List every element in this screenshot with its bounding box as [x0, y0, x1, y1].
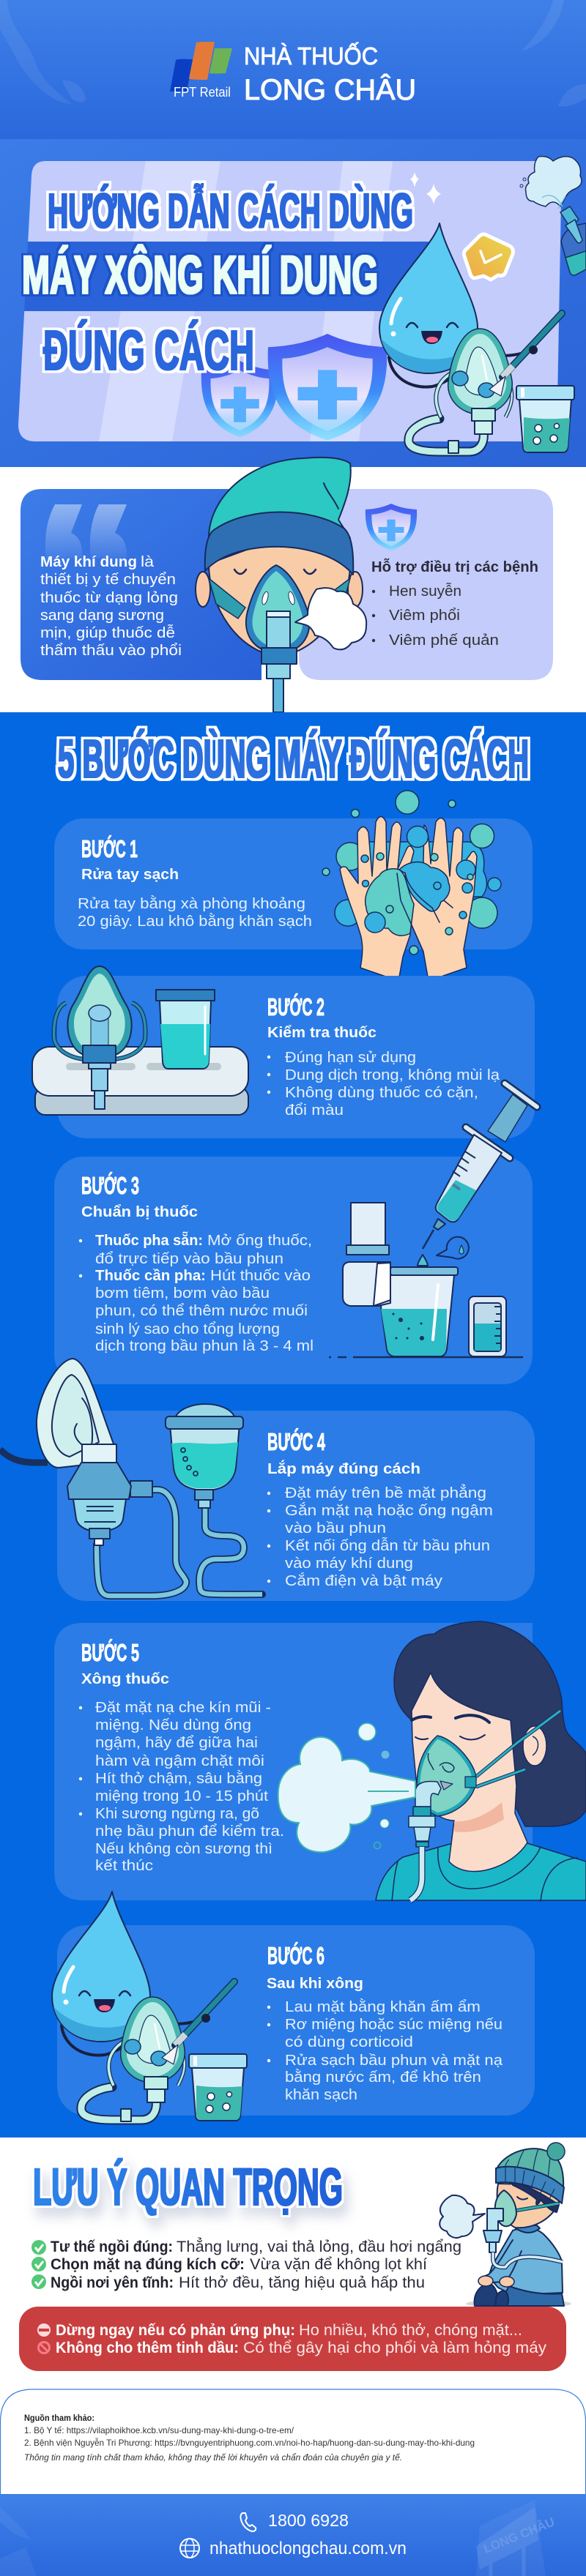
- panel: step 1: Rửa tay sạch: [81, 867, 179, 883]
- page header band: [0, 0, 586, 139]
- panel: step 3: [54, 1157, 533, 1384]
- panel: step 5: miệng. Nếu dùng ống: [95, 1717, 251, 1733]
- panel: step 5: miệng trong 10 - 15 phút: [95, 1788, 268, 1804]
- item: quiet place: [31, 2274, 425, 2291]
- item: mask size: [31, 2256, 427, 2273]
- panel: definition: mịn, giúp thuốc dễ: [40, 624, 175, 641]
- panel: step 3: Hút thuốc vào: [210, 1268, 311, 1284]
- panel: definition: thẩm thấu vào phổi: [40, 643, 182, 659]
- item: posture: [31, 2238, 461, 2255]
- panel: step 2: đổi màu: [285, 1102, 344, 1119]
- panel: diseases: [299, 489, 553, 680]
- references panel: Thông tin mang tính chất tham khảo, không thay thế lời khuyên và chẩn đoán của chuyên gia y tế.: [24, 2452, 402, 2463]
- illustration: filling nebulizer cup: [329, 1203, 523, 1357]
- panel: step 1: 20 giây. Lau khô bằng khăn sạch: [78, 913, 312, 930]
- illustration: syringe: [423, 1083, 537, 1249]
- hero title: ĐÚNG CÁCH: [43, 318, 254, 382]
- panel: step 3: Mở ống thuốc,: [207, 1233, 312, 1249]
- notes heading: LƯU Ý QUAN TRỌNG: [33, 2159, 343, 2217]
- panel: step 3: Chuẩn bị thuốc: [81, 1204, 198, 1220]
- item: posture: Tư thế ngồi đúng:: [51, 2239, 173, 2255]
- panel: step 3: Thuốc cần pha:: [95, 1268, 206, 1284]
- panel: step 6: BƯỚC 6: [267, 1942, 324, 1969]
- item: mask size: Vừa vặn để không lọt khí: [250, 2256, 427, 2273]
- references panel: 2. Bệnh viện Nguyễn Tri Phương: https://bvnguyentriphuong.com.vn/noi-ho-hap/huong-dan-su-dung-may-tho-khi-dung: [24, 2437, 475, 2448]
- references panel: 1. Bộ Y tế: https://vilaphoikhoe.kcb.vn/su-dung-may-khi-dung-o-tre-em/: [24, 2425, 294, 2435]
- warning panel: Dừng ngay nếu có phản ứng phụ:: [56, 2322, 295, 2339]
- panel: step 5: [54, 1623, 533, 1900]
- hero title: [22, 184, 413, 382]
- panel: step 6: Sau khi xông: [267, 1976, 363, 1992]
- panel: step 4: [57, 1411, 535, 1601]
- warning panel: Ho nhiều, khó thở, chóng mặt...: [299, 2322, 522, 2339]
- contact: phone: 1800 6928: [268, 2511, 349, 2530]
- hero panel: [0, 139, 586, 467]
- icon: check badge: [464, 234, 513, 280]
- icon: spraying nebulizer: [520, 157, 586, 275]
- panel: definition: thuốc từ dạng lỏng: [40, 590, 178, 606]
- item: mask size: Chọn mặt nạ đúng kích cỡ:: [51, 2256, 245, 2273]
- panel: diseases: Viêm phế quản: [389, 632, 499, 649]
- warning panel: Có thể gây hại cho phổi và làm hỏng máy: [243, 2340, 547, 2356]
- panel: step 3: dịch trong bầu phun là 3 - 4 ml: [95, 1338, 314, 1354]
- illustration: assembled nebulizer: [0, 1359, 262, 1596]
- panel: step 5: Khi sương ngừng ra, gõ: [95, 1806, 259, 1822]
- panel: step 5: hàm và ngậm chặt môi: [95, 1753, 264, 1769]
- panel: step 5: Nếu không còn sương thì: [95, 1841, 272, 1857]
- logo: Nhà Thuốc Long Châu: LONG CHÂU: [244, 73, 416, 106]
- icon: shields: [201, 334, 387, 441]
- panel: step 4: Lắp máy đúng cách: [267, 1460, 420, 1477]
- illustration: nebulizer machine: [32, 966, 248, 1115]
- watermark: store front: LONG CHÂU: [481, 2515, 557, 2556]
- panel: step 6: có dùng corticoid: [285, 2034, 413, 2050]
- panel: step 3: BƯỚC 3: [81, 1172, 139, 1199]
- panel: step 5: Xông thuốc: [81, 1671, 169, 1687]
- panel: definition: [21, 489, 262, 680]
- warning panel: [19, 2307, 566, 2371]
- panel: step 6: Rửa sạch bầu phun và mặt nạ: [285, 2053, 503, 2069]
- panel: step 2: Dung dịch trong, không mùi lạ: [285, 1067, 500, 1083]
- item: posture: Thẳng lưng, vai thả lỏng, đầu hơi ngẩng: [177, 2238, 461, 2255]
- notes section: [0, 2138, 586, 2494]
- panel: definition: Máy khí dung: [40, 554, 137, 570]
- footer: [0, 2494, 586, 2576]
- panel: step 2: Đúng hạn sử dụng: [285, 1050, 416, 1066]
- panel: step 4: vào bầu phun: [285, 1520, 386, 1537]
- checklist: [31, 2238, 461, 2291]
- illustration: patient with mask: [196, 458, 366, 712]
- mascot: step 6 water drop: [52, 1892, 247, 2121]
- icon: sparkles: [410, 172, 441, 204]
- panel: diseases: Hỗ trợ điều trị các bệnh: [371, 558, 538, 575]
- panel: step 3: phun, có thể thêm nước muối: [95, 1303, 308, 1319]
- panel: definition: thiết bị y tế chuyển: [40, 572, 176, 588]
- panel: definition: là: [141, 554, 155, 570]
- panel: definition: sang dạng sương: [40, 608, 164, 624]
- panel: step 5: BƯỚC 5: [81, 1639, 139, 1666]
- panel: step 3: Thuốc pha sẵn:: [95, 1231, 203, 1249]
- panel: step 4: Gắn mặt nạ hoặc ống ngậm: [285, 1502, 493, 1519]
- panel: step 3: đổ trực tiếp vào bầu phun: [95, 1251, 283, 1267]
- panel: step 4: Cắm điện và bật máy: [285, 1572, 442, 1589]
- intro panel: [0, 458, 586, 712]
- panel: step 5: kết thúc: [95, 1858, 153, 1874]
- panel: step 2: Kiểm tra thuốc: [267, 1025, 377, 1041]
- logo: FPT Retail: FPT Retail: [174, 85, 231, 100]
- panel: step 6: khăn sạch: [285, 2087, 357, 2103]
- references panel: [0, 2389, 586, 2494]
- panel: step 1: Rửa tay bằng xà phòng khoảng: [78, 895, 305, 912]
- references panel: Nguồn tham khảo:: [24, 2413, 94, 2423]
- mascot: water drop with mask: [379, 223, 574, 453]
- illustration: washing hands: [322, 791, 501, 981]
- logo: FPT Retail: [170, 42, 232, 100]
- watermark: store front: [476, 2507, 557, 2576]
- contact: website: nhathuoclongchau.com.vn: [209, 2539, 407, 2558]
- panel: step 4: Kết nối ống dẫn từ bầu phun: [285, 1537, 490, 1554]
- panel: step 6: Lau mặt bằng khăn ấm ẩm: [285, 1998, 481, 2015]
- hero title: MÁY XÔNG KHÍ DUNG: [22, 244, 378, 305]
- panel: step 1: [54, 818, 533, 949]
- panel: step 4: vào máy khí dung: [285, 1556, 413, 1572]
- contact: phone: [240, 2511, 349, 2531]
- panel: step 4: BƯỚC 4: [267, 1428, 325, 1455]
- panel: diseases: Hen suyễn: [389, 583, 461, 600]
- panel: step 6: Rơ miệng hoặc súc miệng nếu: [285, 2017, 502, 2033]
- panel: step 6: bằng nước ấm, để khô trên: [285, 2069, 481, 2086]
- panel: step 5: Hít thở chậm, sâu bằng: [95, 1770, 262, 1787]
- illustration: woman inhaling: [278, 1621, 586, 1901]
- panel: step 4: Đặt máy trên bề mặt phẳng: [285, 1484, 486, 1501]
- panel: step 6: [57, 1925, 535, 2116]
- panel: step 3: sinh lý sao cho tổng lượng: [95, 1321, 280, 1337]
- panel: step 3: bơm tiêm, bơm vào bầu: [95, 1285, 270, 1302]
- panel: step 2: [57, 976, 535, 1138]
- item: quiet place: Hít thở đều, tăng hiệu quả hấp thu: [179, 2274, 425, 2291]
- illustration: child with mask: [440, 2143, 571, 2308]
- logo: Nhà Thuốc Long Châu: [244, 42, 416, 106]
- panel: step 5: Đặt mặt nạ che kín mũi -: [95, 1700, 271, 1716]
- logo: Nhà Thuốc Long Châu: NHÀ THUỐC: [244, 42, 378, 70]
- warning panel: Không cho thêm tinh dầu:: [56, 2340, 239, 2356]
- panel: step 1: BƯỚC 1: [81, 835, 138, 862]
- panel: step 5: nhẹ bầu phun để kiểm tra.: [95, 1823, 284, 1840]
- panel: diseases: Viêm phổi: [389, 608, 460, 624]
- panel: step 2: Không dùng thuốc có cặn,: [285, 1085, 478, 1101]
- item: quiet place: Ngồi nơi yên tĩnh:: [51, 2274, 174, 2291]
- hero card: [18, 161, 562, 441]
- panel: step 2: BƯỚC 2: [267, 993, 324, 1020]
- panel: step 5: ngậm, hãy để giữa hai: [95, 1735, 258, 1751]
